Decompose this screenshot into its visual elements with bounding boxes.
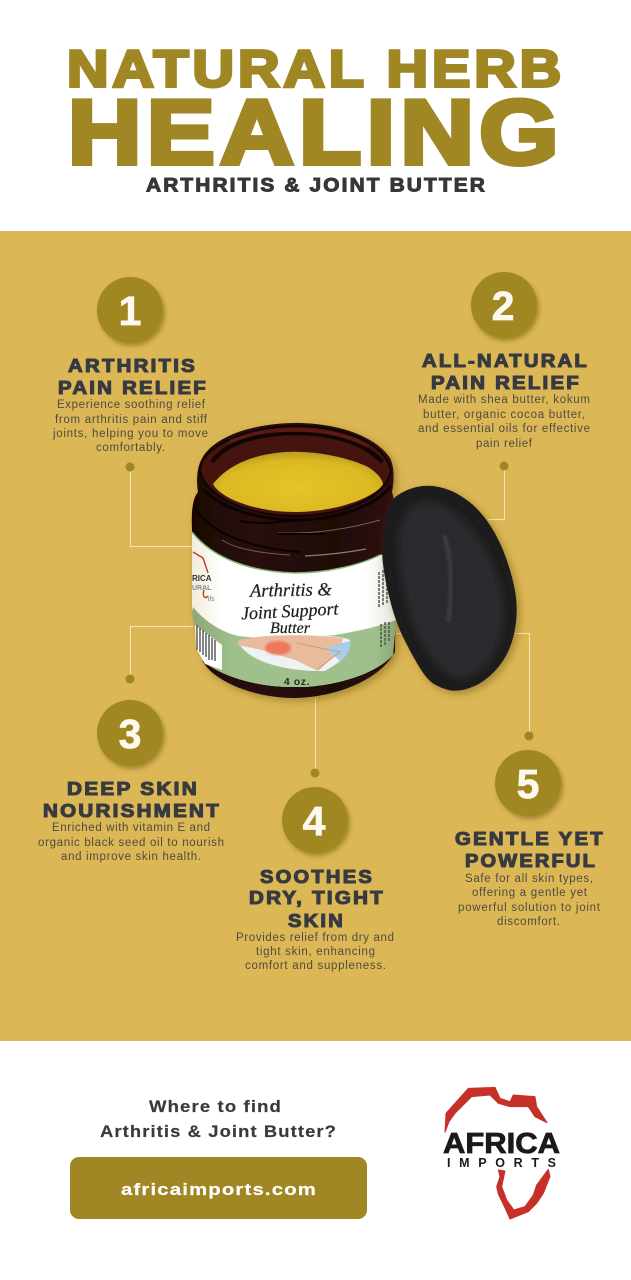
website button: africaimports.com (121, 1180, 317, 1199)
heading 3 (43, 779, 221, 821)
body 1: from arthritis pain and stiff (55, 414, 208, 426)
body 3: Enriched with vitamin E and (52, 822, 210, 834)
heading 3: DEEP SKIN (67, 779, 199, 799)
butter (213, 452, 383, 512)
body 2 (418, 394, 590, 450)
body 3: organic black seed oil to nourish (38, 837, 224, 849)
jar body (192, 423, 396, 698)
heading 3: NOURISHMENT (43, 801, 221, 821)
lid (384, 488, 515, 689)
heading 2 (422, 351, 589, 393)
badge 3 (97, 700, 163, 766)
side label text (379, 568, 389, 648)
badge 5: 5 (517, 761, 539, 807)
step 2: all-natural pain relief (418, 272, 590, 450)
panel: benefits background (0, 231, 631, 1041)
heading 4: DRY, TIGHT (249, 888, 385, 908)
product: jar and lid: ils (208, 596, 215, 603)
step 3: deep skin nourishment (38, 700, 224, 863)
label logo (193, 552, 208, 598)
body 4 (236, 932, 394, 972)
badge 2: 2 (492, 283, 514, 329)
footer question: Arthritis & Joint Butter? (100, 1123, 337, 1141)
title: ARTHRITIS & JOINT BUTTER (146, 174, 487, 196)
map of Africa outline (445, 1087, 550, 1219)
heading 5 (455, 829, 605, 871)
badge 4: 4 (303, 798, 326, 844)
product: jar and lid: URAL (192, 585, 212, 592)
body 4: comfort and suppleness. (245, 960, 386, 972)
body 2: pain relief (476, 438, 533, 450)
body 4: tight skin, enhancing (256, 946, 375, 958)
body 3: and improve skin health. (61, 851, 201, 863)
website button (70, 1157, 367, 1219)
connector lines (126, 462, 534, 778)
body 1: joints, helping you to move (52, 428, 208, 440)
footer question (100, 1098, 337, 1141)
body 3 (38, 822, 224, 863)
step 5: gentle yet powerful (455, 750, 605, 928)
heading 1 (58, 356, 208, 398)
body 5: Safe for all skin types, (465, 873, 593, 885)
footer question: Where to find (149, 1098, 282, 1116)
barcode (195, 625, 222, 670)
title: HEALING (68, 82, 564, 184)
label title: Arthritis & (248, 580, 333, 602)
badge 5 (495, 750, 561, 816)
product: jar and lid: RICA (192, 574, 212, 583)
badge 4 (282, 787, 348, 853)
title (67, 40, 565, 196)
heading 2: PAIN RELIEF (431, 373, 581, 393)
body 5: discomfort. (497, 916, 560, 928)
heading 5: GENTLE YET (455, 829, 605, 849)
heading 2: ALL-NATURAL (422, 351, 589, 371)
logo: Africa Imports (443, 1087, 560, 1219)
heading 4: SOOTHES (260, 867, 374, 887)
title: NATURAL HERB (67, 40, 565, 98)
logo: Africa Imports: IMPORTS (447, 1156, 556, 1170)
label title: Butter (270, 620, 311, 637)
badge 3: 3 (119, 711, 141, 757)
body 5: offering a gentle yet (472, 887, 588, 899)
neck highlights (194, 486, 391, 556)
heading 5: POWERFUL (465, 851, 597, 871)
badge 1 (97, 277, 163, 343)
step 1: arthritis pain relief (52, 277, 208, 454)
logo: Africa Imports: AFRICA (443, 1128, 560, 1160)
heading 4 (249, 867, 385, 931)
body 5 (458, 873, 601, 928)
label title (240, 580, 340, 637)
heading 1: PAIN RELIEF (58, 378, 208, 398)
body 1 (52, 399, 208, 454)
body 1: comfortably. (96, 442, 165, 454)
body 4: Provides relief from dry and (236, 932, 394, 944)
body 2: and essential oils for effective (418, 423, 590, 435)
size text: 4 oz. (284, 676, 310, 688)
body 5: powerful solution to joint (458, 902, 601, 914)
body 1: Experience soothing relief (57, 399, 206, 411)
body 2: Made with shea butter, kokum (418, 394, 590, 406)
jar rim interior (200, 426, 391, 516)
badge 2 (471, 272, 537, 338)
product: jar and lid (192, 423, 515, 698)
step 4: soothes dry, tight skin (236, 787, 394, 972)
label image (238, 635, 350, 671)
heading 1: ARTHRITIS (68, 356, 197, 376)
body 2: butter, organic cocoa butter, (423, 409, 585, 421)
badge 1: 1 (119, 288, 141, 334)
heading 4: SKIN (288, 911, 345, 931)
label title: Joint Support (240, 598, 340, 624)
jar label (192, 532, 396, 687)
